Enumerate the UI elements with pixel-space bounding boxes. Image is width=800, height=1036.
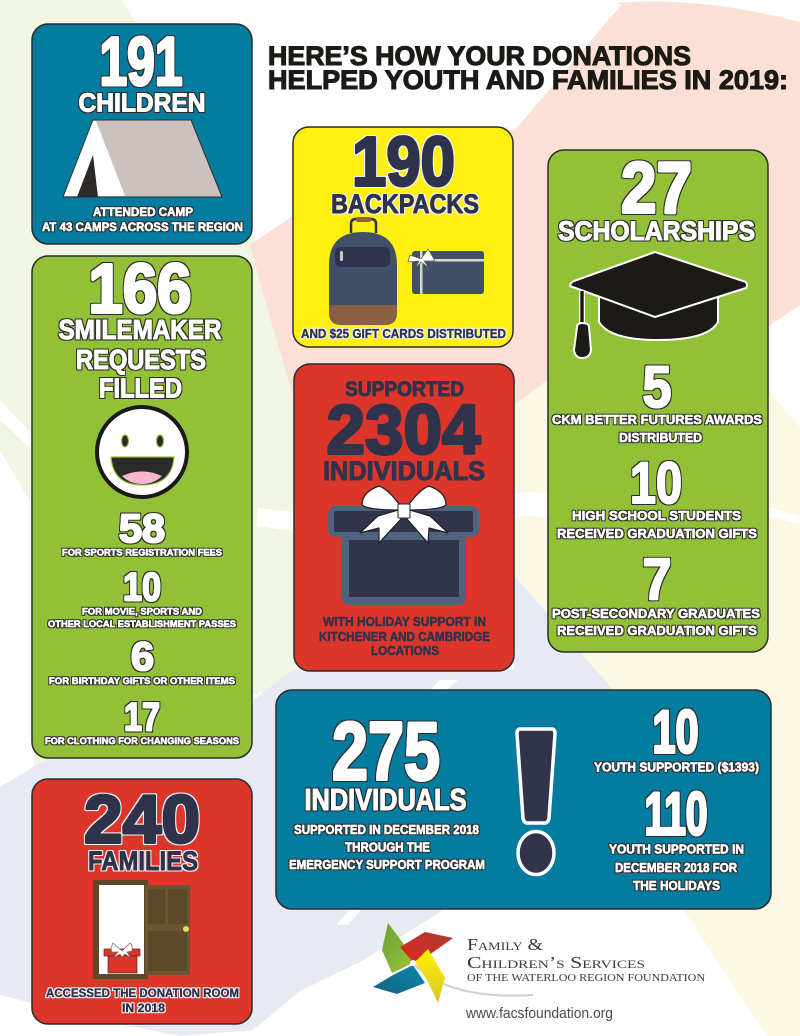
stat: 7 graduates: RECEIVED GRADUATION GIFTS (557, 623, 757, 638)
stat: 5 awards: DISTRIBUTED (619, 430, 702, 445)
icon: exclamation mark (517, 729, 555, 874)
families caption: ACCESSED THE DONATION ROOM (46, 986, 239, 1000)
emergency caption: SUPPORTED IN DECEMBER 2018 (294, 822, 479, 837)
logo: OF THE WATERLOO REGION FOUNDATION (467, 973, 705, 984)
logo: Children’s Services (467, 953, 645, 972)
families number: 240 (84, 782, 200, 858)
title line 2: HELPED YOUTH AND FAMILIES IN 2019: (268, 65, 788, 95)
scholarships heading: SCHOLARSHIPS (558, 216, 755, 246)
panel: emergency support (276, 690, 771, 909)
panel: emergency support: EMERGENCY SUPPORT PROGRAM (289, 857, 485, 872)
icon: gift box with bow (328, 486, 479, 605)
stat: 10 youth: YOUTH SUPPORTED ($1393) (594, 760, 759, 774)
camp caption: ATTENDED CAMP (93, 205, 193, 219)
icon: backpack (329, 217, 397, 325)
icon: gift card (408, 249, 484, 294)
stat: 6 (49, 635, 235, 687)
panel: smilemaker: FILLED (99, 372, 182, 404)
stat: 10 students: RECEIVED GRADUATION GIFTS (557, 526, 757, 541)
stat: 10 students: HIGH SCHOOL STUDENTS (572, 508, 741, 523)
stat: 5 awards (552, 355, 762, 445)
icon: smiley face (97, 407, 187, 497)
stat: 110 youth: 110 (644, 780, 708, 848)
panel: scholarships (548, 148, 768, 652)
icon: door with gift (93, 880, 190, 979)
panel: smilemaker: REQUESTS (76, 344, 206, 375)
stat: 7 graduates: POST-SECONDARY GRADUATES (552, 606, 760, 621)
stat: 10 youth (594, 698, 759, 774)
stat: 6: 6 (131, 635, 154, 679)
icon: tent (63, 120, 222, 197)
stat: 110 youth: YOUTH SUPPORTED IN (609, 842, 744, 856)
smilemaker number: 166 (88, 250, 192, 328)
logo (373, 923, 705, 1022)
panel: smilemaker (32, 250, 252, 758)
stat: 58 (62, 507, 222, 558)
stat: 5 awards: 5 (642, 355, 672, 420)
stat: 58: FOR SPORTS REGISTRATION FEES (62, 548, 222, 558)
stat: 110 youth (609, 780, 744, 893)
stat: 110 youth: THE HOLIDAYS (633, 878, 720, 893)
individuals number: 2304 (326, 390, 481, 468)
individuals heading: SUPPORTED (345, 378, 464, 401)
panel: individuals: LOCATIONS (371, 643, 439, 658)
individuals subheading: INDIVIDUALS (323, 456, 485, 486)
panel: families: IN 2018 (122, 1001, 165, 1015)
stat: 10 students (557, 451, 757, 541)
title line 1: HERE’S HOW YOUR DONATIONS (268, 41, 691, 71)
backpacks heading: BACKPACKS (331, 189, 479, 219)
individuals caption: WITH HOLIDAY SUPPORT IN (323, 614, 486, 629)
panel: emergency support: THROUGH THE (345, 840, 430, 854)
panel: backpacks (293, 122, 513, 347)
smilemaker heading: SMILEMAKER (58, 314, 222, 345)
stat: 10 passes: FOR MOVIE, SPORTS AND (82, 606, 202, 618)
stat: 7 graduates: 7 (642, 547, 672, 612)
stat: 58: 58 (119, 507, 165, 551)
stat: 6: FOR BIRTHDAY GIFTS OR OTHER ITEMS (49, 676, 235, 687)
stat: 17 (45, 696, 239, 747)
stat: 10 youth: 10 (652, 698, 698, 766)
stat: 10 passes (48, 566, 236, 630)
website: www.facsfoundation.org (465, 1005, 613, 1022)
families heading: FAMILIES (88, 846, 198, 876)
camp number: 191 (100, 23, 182, 100)
stat: 7 graduates (552, 547, 760, 638)
stat: 17: FOR CLOTHING FOR CHANGING SEASONS (45, 736, 239, 747)
icon: graduation cap (570, 252, 747, 358)
panel: camp (32, 23, 252, 244)
stat: 10 passes: 10 (123, 566, 161, 610)
stat: 10 passes: OTHER LOCAL ESTABLISHMENT PASSES (48, 619, 236, 630)
camp heading: CHILDREN (78, 88, 206, 118)
scholarships number: 27 (621, 148, 692, 228)
stat: 5 awards: CKM BETTER FUTURES AWARDS (552, 412, 762, 427)
icon: pinwheel (373, 923, 533, 1003)
title (268, 41, 788, 95)
stat: 110 youth: DECEMBER 2018 FOR (615, 860, 738, 875)
stat: 17: 17 (124, 696, 160, 740)
foundation name: Family & (467, 935, 543, 954)
backpacks number: 190 (352, 122, 455, 200)
emergency heading: INDIVIDUALS (304, 783, 466, 817)
emergency number: 275 (332, 704, 440, 798)
panel: families (32, 779, 252, 1024)
backpacks caption: AND $25 GIFT CARDS DISTRIBUTED (301, 327, 506, 341)
stat: 10 students: 10 (630, 451, 682, 516)
panel: individuals: KITCHENER AND CAMBRIDGE (319, 629, 490, 644)
panel: individuals (294, 364, 514, 671)
panel: camp: AT 43 CAMPS ACROSS THE REGION (42, 220, 243, 234)
